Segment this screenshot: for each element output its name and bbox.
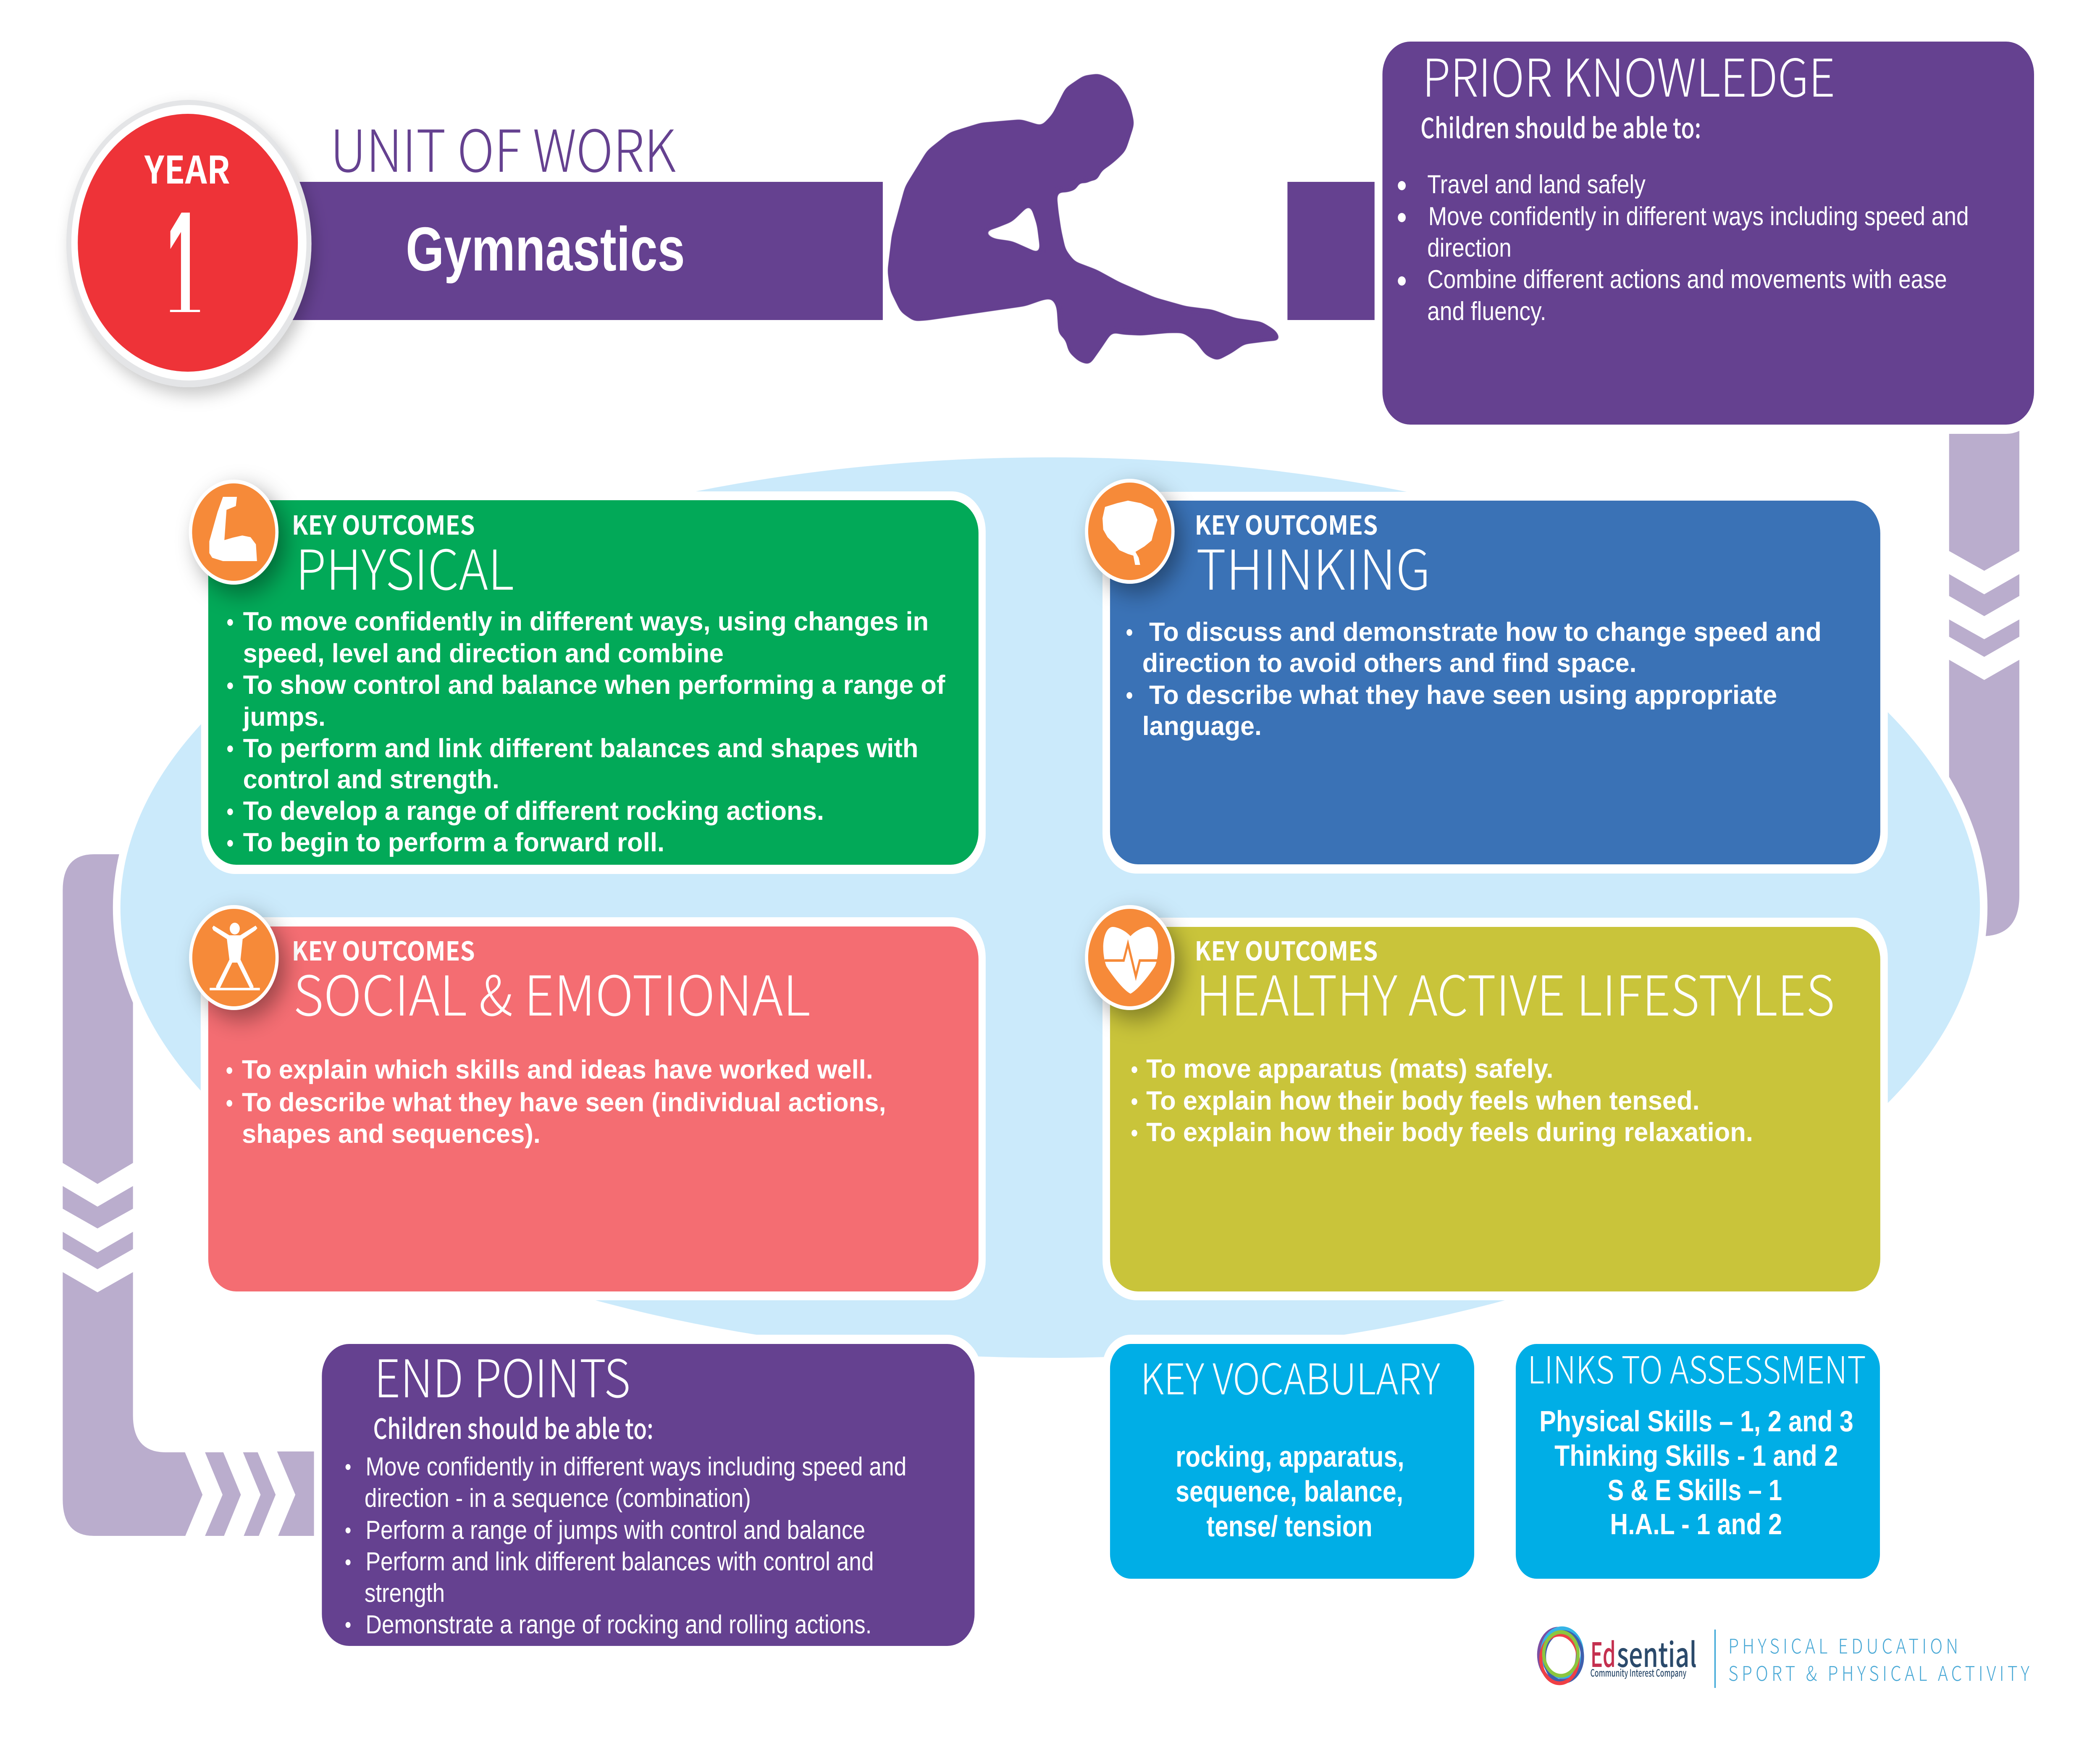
heading: unit of work: UNIT OF WORK [330, 105, 676, 189]
vocabulary list [1176, 1440, 1404, 1543]
heading: healthy active lifestyles: HEALTHY ACTIVE LIFESTYLES [1196, 952, 1835, 1031]
bullet list: shapes and sequences). [242, 1119, 541, 1149]
panel: prior knowledge [1383, 36, 2034, 425]
panel: healthy active lifestyles outcomes [1102, 918, 1888, 1300]
bullet list: To describe what they have seen using appropriate [1149, 680, 1777, 710]
panel: links to assessment [1516, 1340, 1880, 1579]
bullet list: To describe what they have seen (individual actions, [242, 1088, 886, 1117]
text: YEAR: YEAR [144, 140, 230, 194]
tagline [1728, 1630, 2029, 1687]
logo ring [1539, 1628, 1583, 1683]
bullet list: and fluency. [1427, 297, 1546, 326]
label: key outcomes: KEY OUTCOMES [292, 930, 475, 968]
icon: star-jump figure [189, 905, 279, 1010]
tagline: PHYSICAL EDUCATION [1728, 1630, 1958, 1659]
bullet list: To explain which skills and ideas have worked well. [242, 1055, 873, 1084]
bullet list [346, 1452, 906, 1639]
arrow: prior knowledge down to outcomes [1949, 420, 2019, 936]
text: Gymnastics: Gymnastics [406, 215, 685, 284]
bullet list: strength [365, 1579, 445, 1608]
bullet list: To discuss and demonstrate how to change speed and [1149, 617, 1822, 647]
bullet list: Perform and link different balances with control and [365, 1547, 874, 1576]
vocabulary list: rocking, apparatus, [1176, 1440, 1404, 1473]
bullet list: Demonstrate a range of rocking and rolling actions. [365, 1610, 872, 1639]
bullet list: To develop a range of different rocking actions. [243, 796, 824, 826]
title bar: gymnastics [251, 182, 883, 320]
heading: physical: PHYSICAL [296, 526, 514, 606]
arrow: outcomes down to end points [63, 854, 323, 1536]
assessment list [1539, 1405, 1853, 1541]
panel: key vocabulary [1110, 1344, 1474, 1579]
label: key outcomes: KEY OUTCOMES [1194, 930, 1378, 968]
panel: physical outcomes [201, 491, 986, 874]
heading: prior knowledge: PRIOR KNOWLEDGE [1422, 36, 1835, 112]
bullet list: To explain how their body feels during relaxation. [1146, 1118, 1753, 1147]
vocabulary list: sequence, balance, [1176, 1475, 1403, 1508]
heading: end points: END POINTS [374, 1337, 630, 1412]
bullet list: language. [1142, 711, 1262, 741]
subheading: Children should be able to: [1420, 106, 1701, 147]
panel: end points [322, 1337, 974, 1646]
wordmark: Ed [1590, 1628, 1616, 1677]
logo: Edsential: sential [1617, 1628, 1697, 1677]
bullet list: To begin to perform a forward roll. [243, 828, 664, 857]
heading: links to assessment: LINKS TO ASSESSMENT [1528, 1340, 1866, 1394]
logo: Edsential: Community Interest Company [1590, 1665, 1686, 1680]
bullet list: To explain how their body feels when tensed. [1146, 1086, 1700, 1115]
bullet list: To move apparatus (mats) safely. [1146, 1054, 1554, 1084]
bullet list: To perform and link different balances and shapes with [243, 734, 918, 763]
subheading: Children should be able to: [373, 1407, 654, 1447]
icon: flexed arm [189, 480, 278, 585]
assessment list: H.A.L - 1 and 2 [1610, 1508, 1782, 1541]
assessment list: Physical Skills – 1, 2 and 3 [1539, 1405, 1853, 1438]
bullet list: Move confidently in different ways including speed and [365, 1452, 906, 1481]
bullet list: speed, level and direction and combine [243, 639, 724, 668]
heading: social and emotional: SOCIAL & EMOTIONAL [293, 952, 811, 1031]
bullet list: direction to avoid others and find space. [1142, 648, 1637, 678]
label: key outcomes: KEY OUTCOMES [1194, 504, 1378, 542]
badge: year 1: 1 [166, 176, 202, 362]
assessment list: S & E Skills – 1 [1607, 1474, 1782, 1506]
badge: year 1 [66, 100, 312, 387]
bullet list: jumps. [243, 702, 326, 732]
bullet list: direction [1427, 234, 1512, 262]
bullet list [1131, 1054, 1753, 1147]
heading: thinking: THINKING [1196, 526, 1431, 606]
bullet list: To show control and balance when performing a range of [243, 670, 945, 700]
divider [1714, 1630, 1716, 1688]
icon: brain [1085, 479, 1175, 584]
bullet list: Move confidently in different ways including speed and [1428, 202, 1969, 231]
icon: heart with pulse [1085, 905, 1175, 1010]
gymnast silhouette [887, 73, 1282, 365]
panel: social and emotional outcomes [201, 917, 986, 1300]
background ellipse [121, 457, 1980, 1358]
bullet list: control and strength. [243, 765, 499, 794]
panel: thinking outcomes [1102, 492, 1888, 874]
bullet list [1126, 617, 1822, 741]
heading: key vocabulary: KEY VOCABULARY [1140, 1346, 1440, 1407]
bullet list [227, 607, 945, 857]
connector bar to prior knowledge [1287, 182, 1375, 320]
label: key outcomes: KEY OUTCOMES [292, 504, 475, 542]
assessment list: Thinking Skills - 1 and 2 [1554, 1439, 1838, 1472]
bullet list: Perform a range of jumps with control and balance [365, 1516, 865, 1545]
bullet list: Travel and land safely [1427, 170, 1646, 199]
vocabulary list: tense/ tension [1207, 1510, 1373, 1543]
bullet list [1398, 170, 1969, 326]
bullet list: Combine different actions and movements with ease [1427, 265, 1947, 294]
logo: Edsential [1539, 1628, 1697, 1683]
bullet list [226, 1055, 886, 1149]
bullet list: direction - in a sequence (combination) [365, 1484, 751, 1513]
bullet list: To move confidently in different ways, using changes in [243, 607, 929, 636]
tagline: SPORT & PHYSICAL ACTIVITY [1728, 1657, 2029, 1687]
